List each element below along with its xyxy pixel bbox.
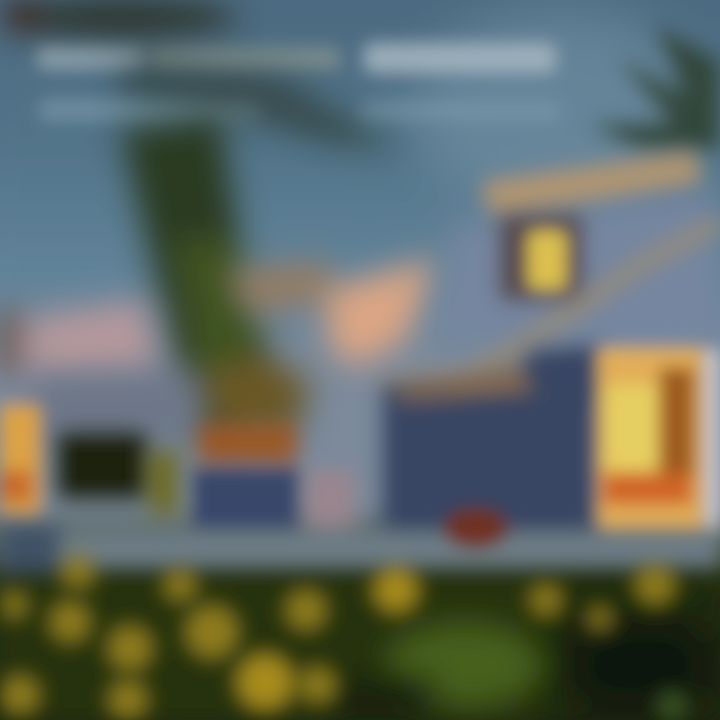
lower left haze wall xyxy=(30,372,200,442)
right sky lightening xyxy=(410,10,710,210)
pink column xyxy=(305,470,355,530)
tan eave over blue wall xyxy=(395,365,535,402)
palm fronds: top right xyxy=(590,25,720,150)
blue planter box xyxy=(192,468,300,530)
red object at base of wall xyxy=(444,508,508,548)
left lit window xyxy=(0,405,40,513)
grey terrace band xyxy=(0,532,720,568)
palm trunk xyxy=(120,115,310,440)
diagonal tan palm stem xyxy=(380,222,720,385)
distant pink roofs xyxy=(0,258,438,378)
upper window glow xyxy=(527,230,567,290)
upper house tan roof xyxy=(482,152,702,215)
garden foreground xyxy=(0,572,720,720)
large lit window xyxy=(598,348,704,530)
far right pale wall xyxy=(706,350,720,530)
olive post xyxy=(148,450,180,515)
headline placeholder: illegible blurred title xyxy=(38,44,560,120)
upper house grey wall xyxy=(440,190,720,345)
lower house dark blue wall xyxy=(382,385,597,535)
yellow flowers xyxy=(0,555,686,720)
upper window frame xyxy=(500,215,582,300)
orange planter xyxy=(198,425,298,463)
palm fronds: top left xyxy=(0,0,400,150)
dark shrub at left xyxy=(56,432,148,500)
